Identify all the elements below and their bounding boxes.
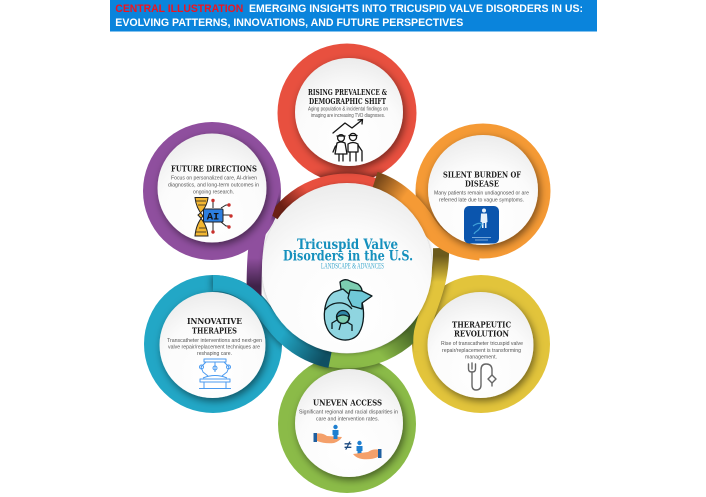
text: rising prevalence: imaging are increasing TVD diagnoses.	[311, 113, 385, 119]
panel: innovative therapies	[160, 292, 266, 398]
heading: silent burden: DISEASE	[465, 179, 499, 189]
heading: silent burden	[443, 169, 521, 189]
heading: rising prevalence: DEMOGRAPHIC SHIFT	[309, 96, 386, 106]
panel: uneven access	[295, 369, 403, 477]
text: therapeutic revolution	[441, 341, 523, 360]
panel: rising prevalence	[295, 58, 403, 166]
text: innovative therapies: valve repair/replacement techniques are	[168, 345, 260, 351]
icon: hands with unequal people: ≠	[344, 438, 352, 453]
text: future directions: ongoing research.	[193, 189, 234, 195]
text: future directions: diagnostics, and long-term outcomes in	[168, 183, 259, 189]
heading: therapeutic revolution	[452, 319, 511, 339]
heading: central title: Disorders in the U.S.	[283, 249, 413, 265]
panel: therapeutic revolution	[428, 292, 534, 398]
heading: central title	[283, 237, 413, 265]
header banner: CENTRAL ILLUSTRATION	[115, 3, 243, 15]
icon: blue patient badge	[464, 206, 499, 244]
icon: transcatheter device	[468, 363, 496, 390]
heading: rising prevalence	[308, 87, 388, 106]
central hub	[262, 183, 432, 353]
text: future directions	[168, 176, 259, 195]
heading: therapeutic revolution: REVOLUTION	[454, 329, 509, 339]
heading: rising prevalence: RISING PREVALENCE &	[308, 87, 388, 97]
heading: silent burden: SILENT BURDEN OF	[443, 169, 521, 179]
icon: surgical robot	[199, 359, 231, 388]
heading: innovative therapies	[187, 316, 242, 335]
text: therapeutic revolution: repair/replacement is transforming	[442, 348, 521, 354]
text: uneven access	[299, 410, 398, 422]
icon: DNA and AI chip: AI	[207, 212, 219, 224]
text: silent burden: referred late due to vague symptoms.	[439, 198, 524, 204]
outer coloured rings	[143, 44, 550, 493]
central swirl ribbons	[213, 178, 480, 361]
subtitle: landscape and advances: LANDSCAPE & ADVANCES	[321, 262, 384, 271]
header banner: EVOLVING PATTERNS, INNOVATIONS, AND FUTURE PERSPECTIVES	[115, 17, 463, 29]
heading: innovative therapies: INNOVATIVE	[187, 316, 242, 326]
text: rising prevalence: Aging population & incidental findings on	[308, 107, 388, 113]
text: uneven access: Significant regional and racial disparities in	[299, 410, 398, 416]
panel: future directions	[158, 134, 266, 242]
heading: central title: Tricuspid Valve	[297, 237, 398, 253]
heading: uneven access: UNEVEN ACCESS	[313, 398, 382, 408]
text: therapeutic revolution: management.	[465, 354, 497, 360]
panel: silent burden of disease	[428, 135, 538, 245]
header banner: EMERGING INSIGHTS INTO TRICUSPID VALVE DISORDERS IN US:	[249, 3, 583, 15]
text: rising prevalence	[308, 107, 388, 119]
text: therapeutic revolution: Rise of transcatheter tricuspid valve	[441, 341, 523, 347]
text: silent burden: Many patients remain undiagnosed or are	[434, 191, 529, 197]
text: innovative therapies: Transcatheter interventions and next-gen	[167, 338, 262, 344]
heading: innovative therapies: THERAPIES	[192, 325, 237, 335]
heading: future directions: FUTURE DIRECTIONS	[171, 164, 257, 174]
header banner	[110, 0, 597, 32]
heading: therapeutic revolution: THERAPEUTIC	[452, 319, 511, 329]
icon: heart	[324, 280, 372, 340]
text: innovative therapies: reshaping care.	[197, 351, 232, 357]
text: uneven access: care and intervention rates.	[316, 416, 379, 422]
icon: elderly couple with rising arrow	[333, 120, 362, 161]
text: innovative therapies	[167, 338, 262, 357]
text: future directions: Focus on personalized care, AI-driven	[171, 176, 257, 182]
text: silent burden	[434, 191, 529, 204]
